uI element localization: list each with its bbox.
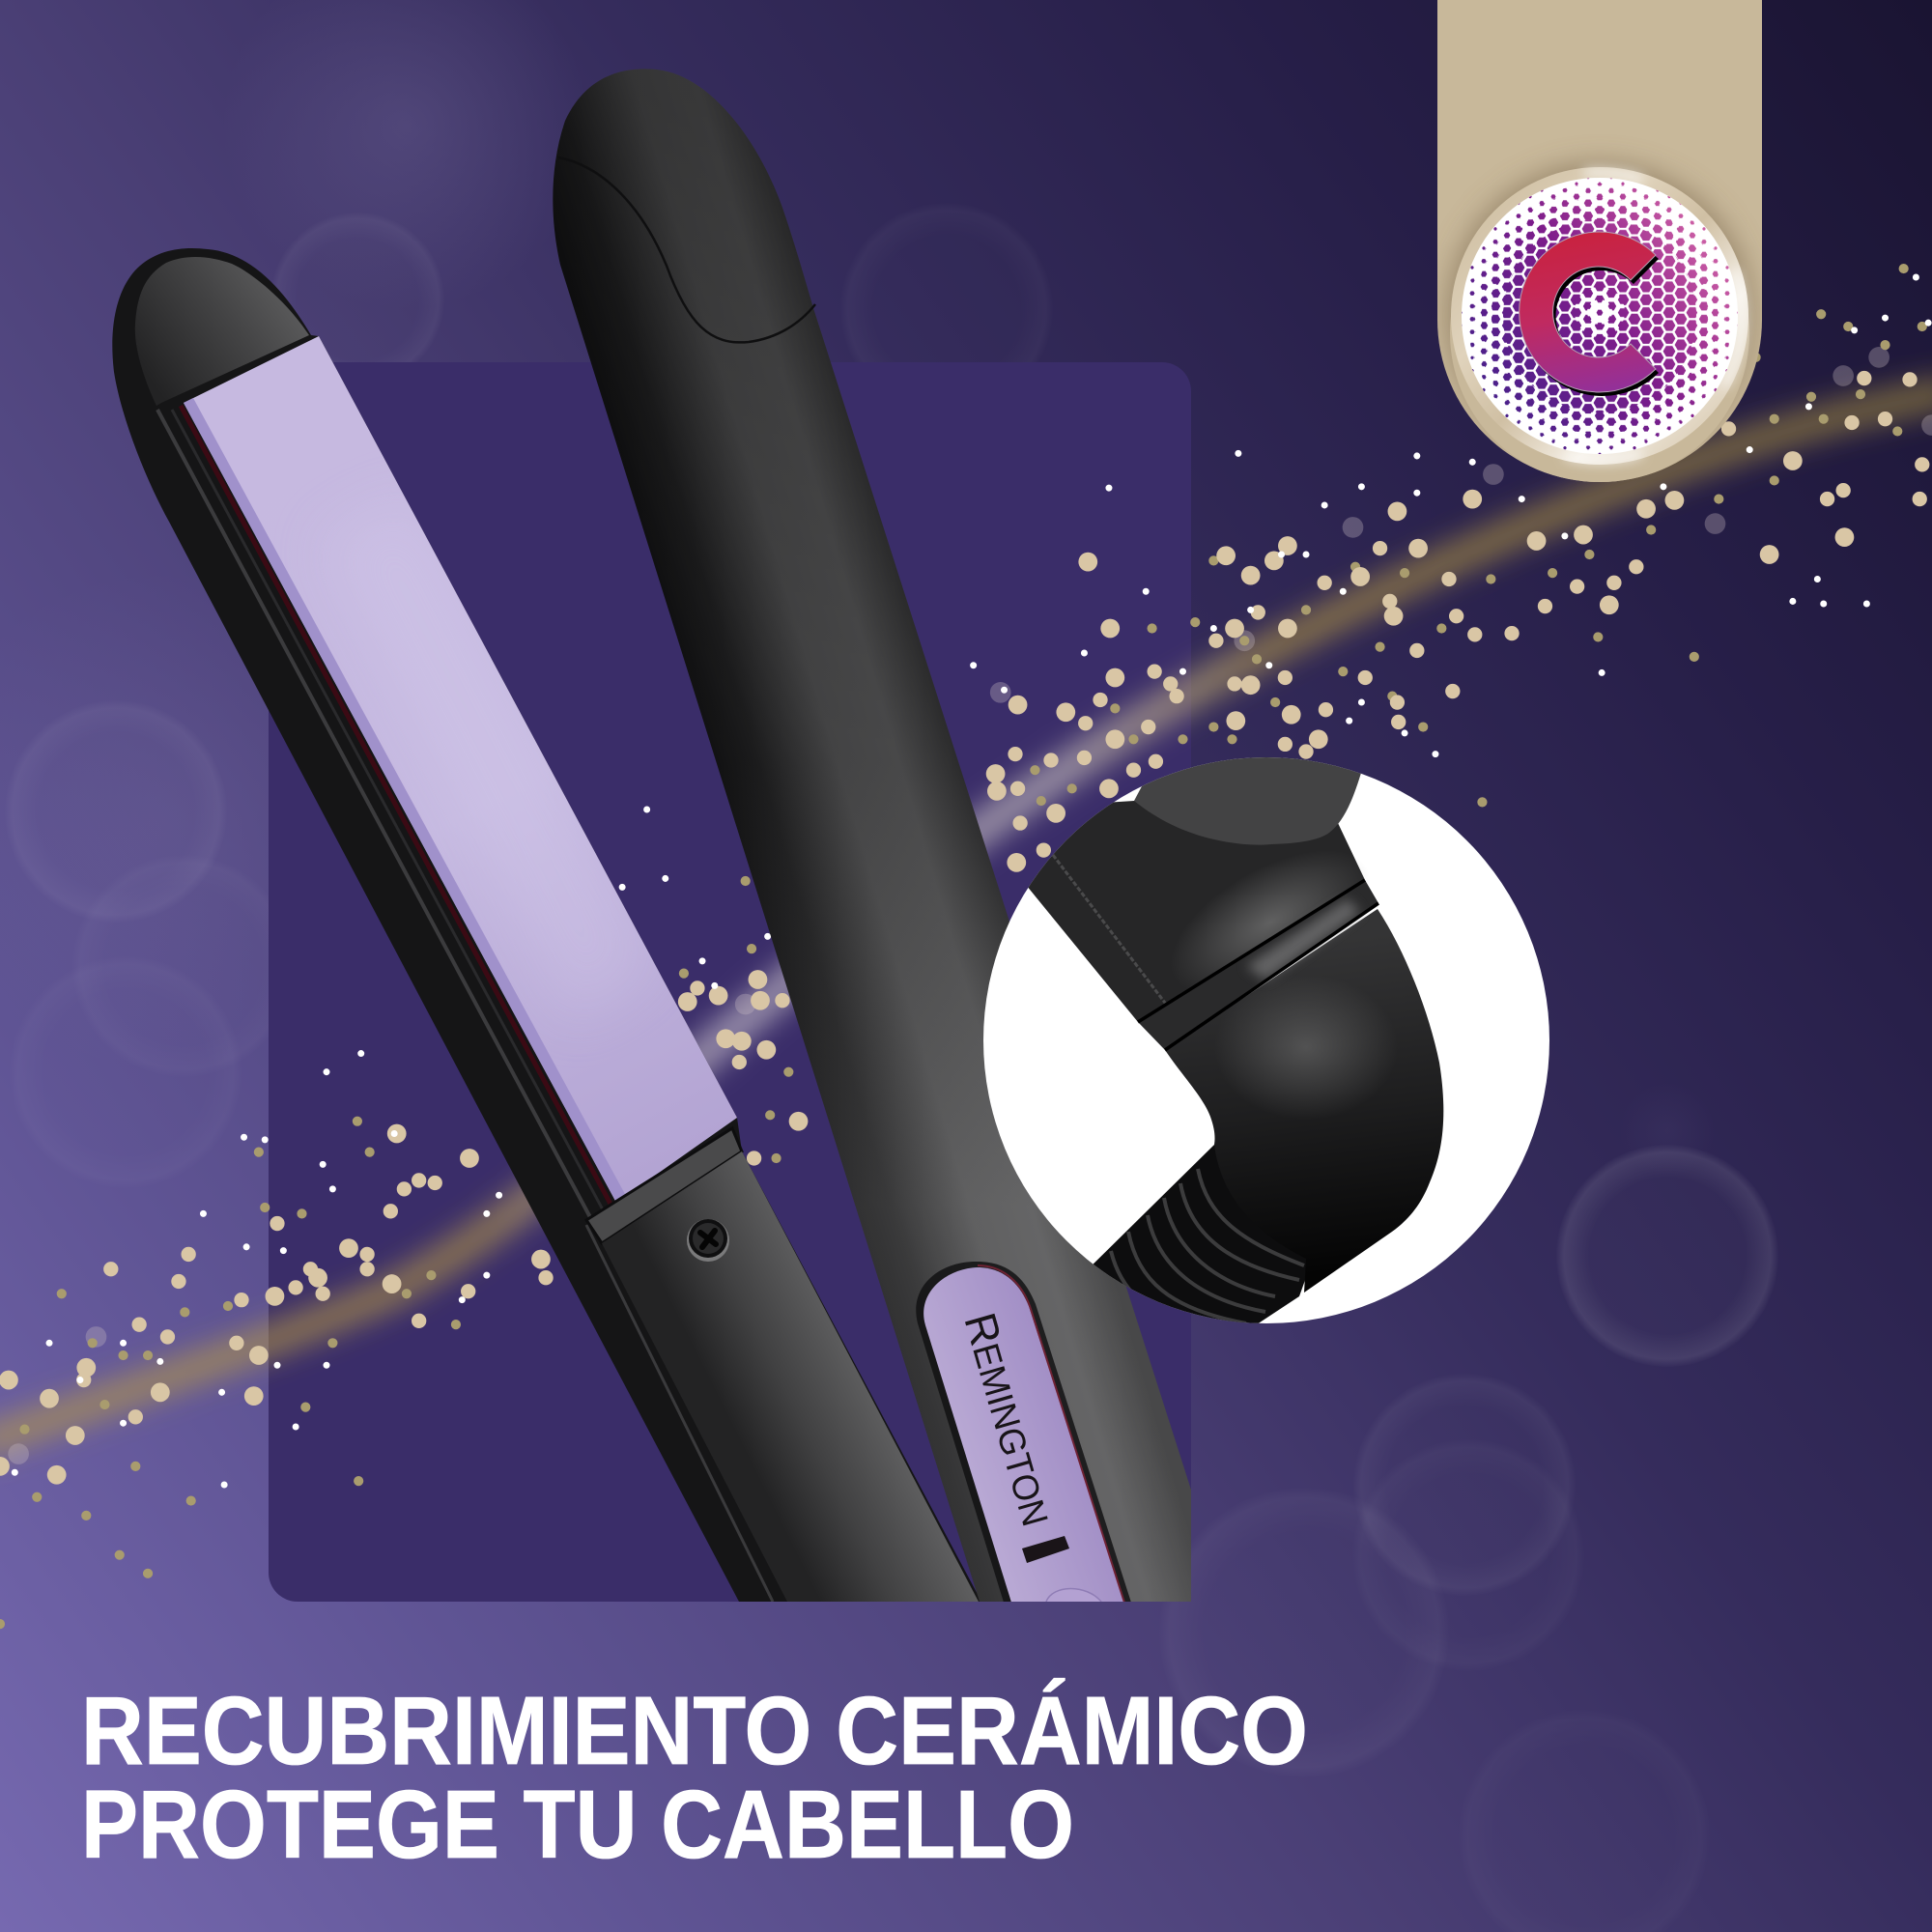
cord ribs (1111, 1169, 1304, 1328)
badge plate (923, 1267, 1125, 1605)
right arm body (553, 69, 1227, 1602)
lens white disc (983, 757, 1549, 1323)
lower arm body (602, 1151, 979, 1602)
lower swivel body (1165, 909, 1443, 1293)
letter C (1520, 232, 1659, 396)
cord (1082, 1145, 1314, 1352)
plate light sheen (420, 526, 615, 962)
halftone hexagon disc (1449, 164, 1758, 473)
white particles (14, 277, 1928, 1485)
ribbon shadow around medallion (1447, 163, 1752, 483)
collar highlight (1246, 898, 1360, 980)
seam on upper body (1053, 855, 1174, 1014)
badge edge (978, 1265, 1125, 1605)
lens product crop (966, 744, 1443, 1352)
translucent large particles (18, 357, 1932, 1454)
badge button (1046, 1588, 1101, 1602)
tan particles, large (0, 461, 1844, 1475)
gold and white sparkle particles (0, 269, 1932, 1624)
rails beside plate (157, 406, 773, 1602)
upper swivel body (966, 801, 1365, 1022)
brand badge (916, 1262, 1132, 1605)
brand bar mark (1022, 1536, 1069, 1563)
ceramic medallion (1449, 164, 1758, 473)
letter C face (1520, 232, 1656, 392)
badge surround (916, 1262, 1132, 1605)
letter C shadow (1522, 236, 1659, 396)
right iron arm (553, 69, 1227, 1605)
ceramic plate (184, 336, 737, 1203)
tan particles, medium (84, 379, 1922, 1417)
lower collar band (586, 1128, 742, 1243)
olive particles (0, 269, 1922, 1624)
ring highlights (1565, 172, 1742, 460)
right arm shading (553, 69, 1227, 1602)
title line 2: PROTEGE TU CABELLO (81, 1771, 1074, 1879)
left arm tip cap (135, 257, 309, 406)
left iron arm with ceramic plate (112, 248, 981, 1602)
upper body highlight (1148, 821, 1393, 1024)
collar band (1138, 880, 1378, 1050)
plate left edge highlight (184, 398, 626, 1203)
right arm cap seam (558, 157, 815, 342)
product: open straightener, clipped to the card (112, 69, 1227, 1605)
title line 1: RECUBRIMIENTO CERÁMICO (81, 1677, 1308, 1785)
medallion metallic ring (1457, 172, 1743, 460)
left arm outer shell (112, 248, 981, 1602)
ceramic ribbon (1437, 0, 1762, 482)
top cap in lens (1134, 744, 1364, 845)
gold glow trail (0, 391, 1932, 1444)
detail lens: swivel cord close-up (966, 744, 1549, 1352)
lower body highlight (1214, 975, 1398, 1120)
brand wordmark: REMINGTON (954, 1307, 1064, 1531)
screw (687, 1219, 729, 1262)
title (81, 1677, 1308, 1879)
collar lines (1138, 880, 1378, 1050)
panel: purple rounded card behind the irons (269, 362, 1191, 1602)
